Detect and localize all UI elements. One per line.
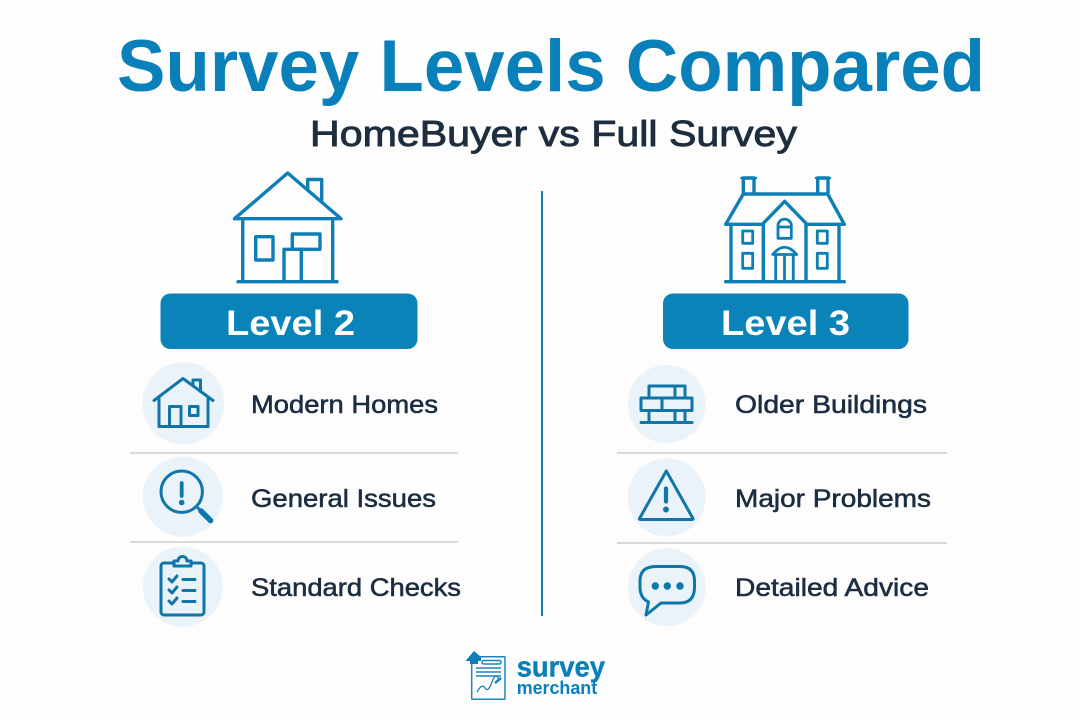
logo: survey merchant: survey [517, 652, 605, 684]
item: general issues: General Issues [251, 485, 436, 513]
item: major problems: Major Problems [735, 485, 931, 513]
badge: level 3: Level 3 [721, 304, 850, 343]
item: older buildings: Older Buildings [735, 391, 927, 419]
subtitle: HomeBuyer vs Full Survey [310, 113, 797, 154]
item: older buildings [628, 365, 927, 443]
item: detailed advice: Detailed Advice [735, 574, 929, 602]
item: standard checks: Standard Checks [251, 574, 461, 602]
icon: warning triangle [639, 471, 693, 520]
panel: level 2 [130, 173, 461, 627]
badge: level 2: Level 2 [226, 304, 355, 343]
logo: survey merchant [466, 651, 605, 699]
title: Survey Levels Compared [117, 26, 985, 107]
item: modern homes [142, 362, 438, 444]
item: general issues [143, 457, 436, 537]
icon: report document [466, 651, 505, 699]
icon: speech bubble [640, 566, 694, 615]
badge: level 3 [663, 294, 908, 349]
panel: level 3 [617, 178, 947, 626]
item: standard checks [143, 547, 461, 627]
icon: clipboard [161, 556, 204, 615]
icon: large house [726, 178, 844, 282]
item: detailed advice [628, 548, 929, 626]
icon: home [154, 378, 213, 426]
icon: bricks [641, 386, 692, 422]
logo: survey merchant: merchant [517, 677, 597, 698]
item: modern homes: Modern Homes [251, 391, 438, 419]
badge: level 2 [160, 294, 418, 349]
icon: small house [234, 173, 341, 282]
icon: magnifier with exclamation [161, 471, 210, 520]
item: major problems [628, 458, 931, 536]
